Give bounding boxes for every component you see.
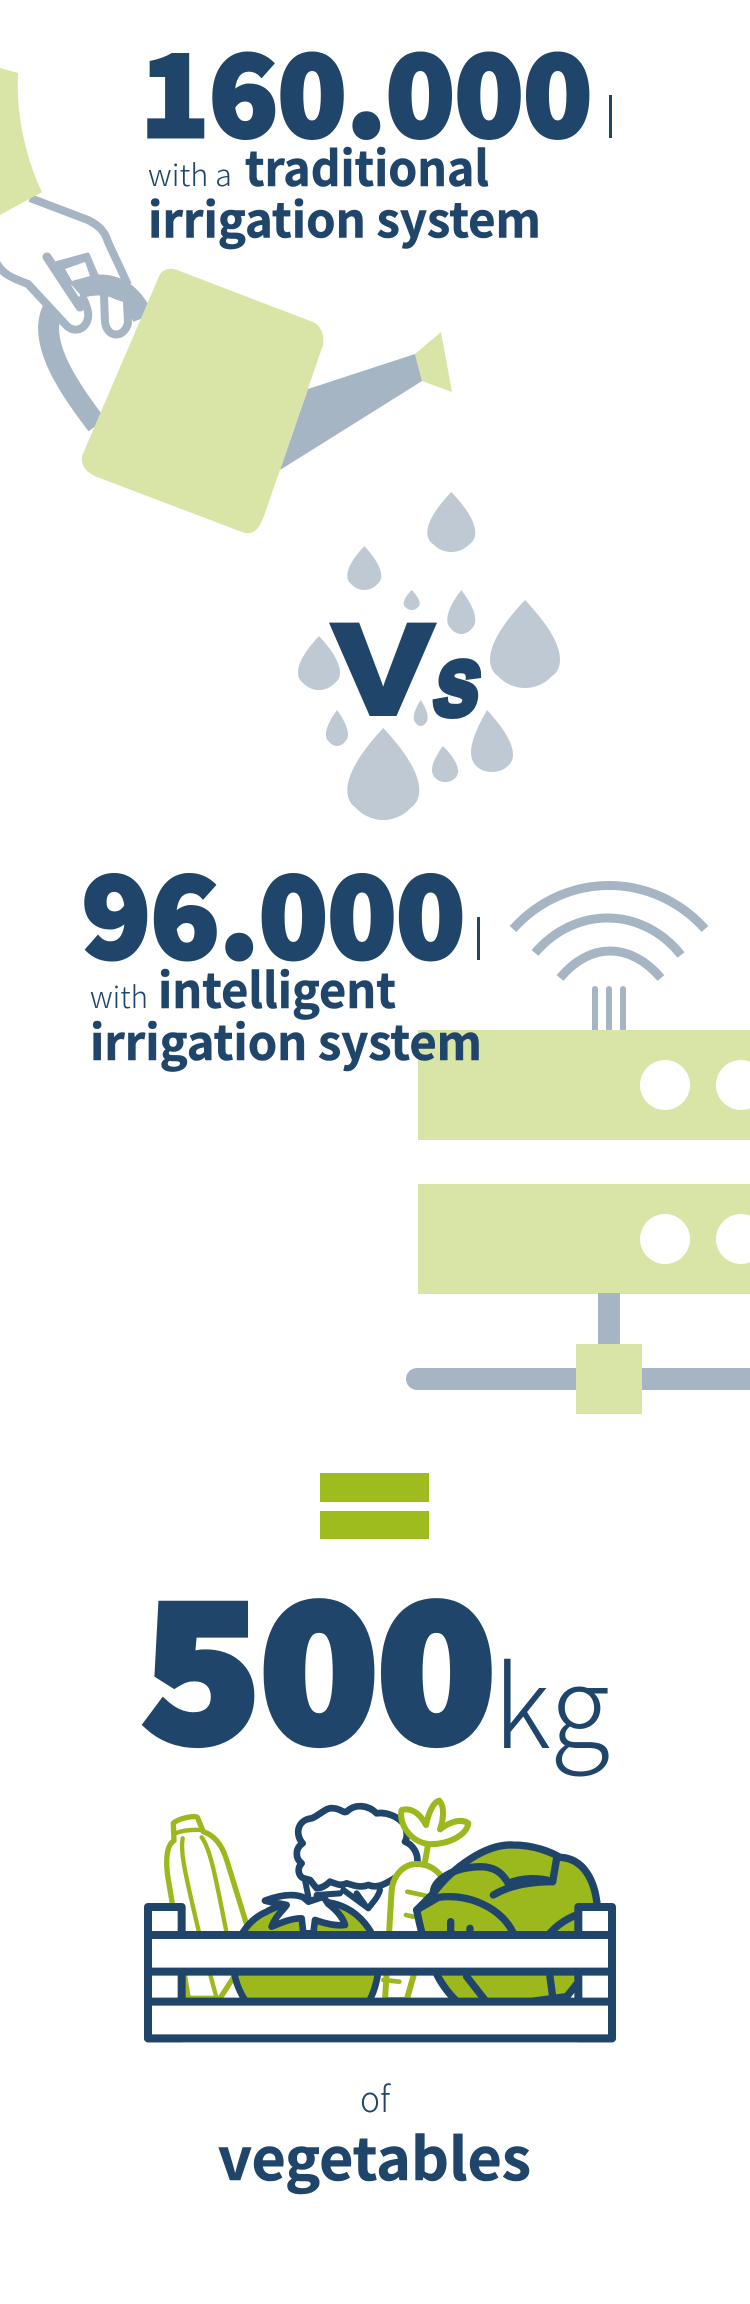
wifi arcs — [513, 886, 705, 978]
can handle — [49, 285, 143, 425]
network node — [576, 1344, 642, 1414]
pipe mark — [477, 917, 480, 960]
antenna bars — [595, 989, 623, 1031]
icon: vegetable crate — [148, 1801, 612, 2038]
text: with a traditional irrigation system: traditional — [245, 130, 489, 200]
sleeve — [0, 68, 42, 215]
second finger — [104, 296, 128, 335]
cabbage — [417, 1845, 597, 2010]
number: 160.000: 160.000 — [140, 8, 592, 170]
text: with intelligent irrigation system — [90, 952, 482, 1074]
text: with intelligent irrigation system: intelligent — [158, 952, 396, 1022]
text: of: of — [360, 2071, 391, 2123]
heading: Vs: V — [333, 598, 433, 740]
icon: water drops — [298, 492, 560, 820]
text: with a traditional irrigation system — [148, 130, 541, 252]
heading: Vs — [333, 598, 492, 740]
nozzle — [415, 332, 452, 392]
crate slats — [148, 1935, 612, 2038]
text: vegetables: vegetables — [218, 2113, 531, 2197]
text: with intelligent irrigation system: irrigation system — [90, 1004, 482, 1074]
unit: kg: kg — [493, 1619, 610, 1781]
number: 96.000: 96.000 — [82, 829, 465, 991]
server unit 2 — [418, 1184, 750, 1294]
text: with intelligent irrigation system: with — [90, 973, 148, 1017]
server unit 1 — [418, 1030, 750, 1140]
text: with a traditional irrigation system: with a — [148, 151, 232, 195]
spout — [280, 354, 422, 470]
number: 500: 500 — [143, 1524, 495, 1795]
icon: wifi router server — [406, 886, 750, 1414]
tomato — [233, 1895, 379, 2013]
stem and network bar — [598, 1293, 620, 1345]
finger knuckle box — [55, 254, 100, 284]
heading: Vs: s — [426, 626, 492, 737]
carrot — [383, 1801, 468, 2000]
pipe mark — [609, 95, 612, 138]
broccoli — [297, 1806, 417, 1908]
text: with a traditional irrigation system: irrigation system — [148, 182, 541, 252]
crate posts — [148, 1907, 612, 2038]
index finger and palm — [0, 240, 88, 330]
thumb outline — [30, 198, 128, 285]
icon: watering can with hand — [0, 68, 452, 533]
equals sign — [320, 1473, 429, 1539]
can body — [82, 269, 323, 533]
zucchini — [167, 1817, 253, 1998]
